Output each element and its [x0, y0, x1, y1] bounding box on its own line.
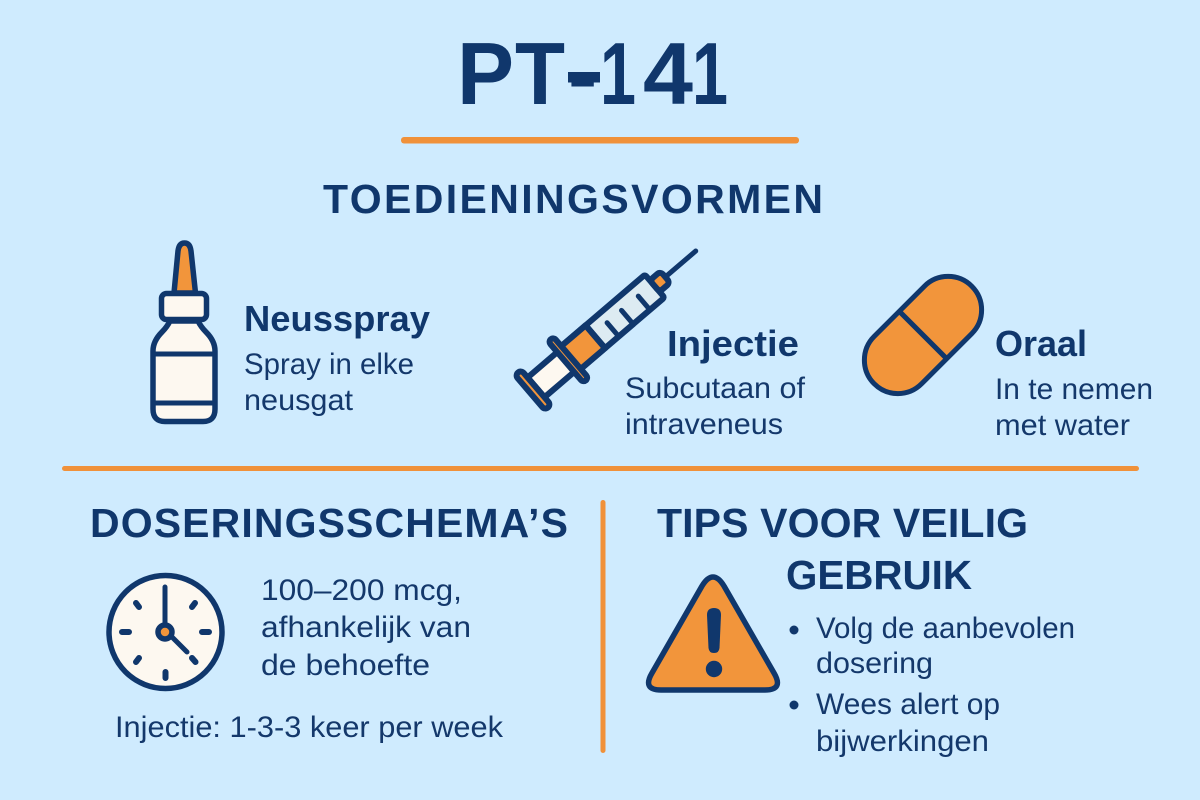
bullet list: dosering — [816, 647, 933, 680]
icon: nasal spray bottle — [153, 243, 215, 422]
title: 1 — [600, 24, 636, 123]
dose text: 100–200 mcg, — [261, 574, 462, 607]
title: T — [515, 24, 565, 123]
heading: tips voor veilig gebruik: TIPS VOOR VEILIG — [657, 500, 1028, 546]
label: oraal: Oraal — [995, 323, 1087, 364]
description: oraal: In te nemen — [995, 373, 1153, 406]
dose text: afhankelijk van — [261, 611, 471, 644]
description: oraal: met water — [995, 409, 1130, 442]
bullet list — [790, 612, 1075, 758]
panel: oraal — [851, 263, 1153, 442]
icon: warning triangle — [649, 577, 777, 690]
label: injectie: Injectie — [667, 323, 799, 364]
injection frequency: Injectie: 1-3-3 keer per week — [115, 711, 504, 744]
description: injectie: Subcutaan of — [625, 372, 806, 405]
label: neusspray: Neusspray — [244, 298, 430, 339]
title: P — [457, 24, 514, 123]
title: - — [568, 24, 597, 123]
panel: tips voor veilig gebruik — [649, 500, 1075, 758]
title — [457, 24, 728, 123]
title: 4 — [643, 24, 693, 123]
icon: syringe — [512, 230, 713, 413]
bullet list: bijwerkingen — [816, 725, 989, 758]
heading: toedieningsvormen: TOEDIENINGSVORMEN — [323, 176, 823, 222]
bullet list: Wees alert op — [816, 688, 1000, 721]
panel: neusspray — [153, 243, 430, 422]
icon: clock — [109, 576, 222, 688]
title: 1 — [692, 24, 728, 123]
description: neusspray: Spray in elke — [244, 348, 414, 381]
panel: injectie — [512, 230, 806, 441]
bullet list: Volg de aanbevolen — [816, 612, 1075, 645]
panel: doseringsschema's — [90, 500, 568, 744]
description: injectie: intraveneus — [625, 408, 783, 441]
description: neusspray: neusgat — [244, 384, 354, 417]
dose text: de behoefte — [261, 649, 430, 682]
heading: tips voor veilig gebruik: GEBRUIK — [786, 552, 972, 598]
icon: capsule pill — [851, 263, 995, 407]
heading: doseringsschema's: DOSERINGSSCHEMA’S — [90, 500, 568, 546]
